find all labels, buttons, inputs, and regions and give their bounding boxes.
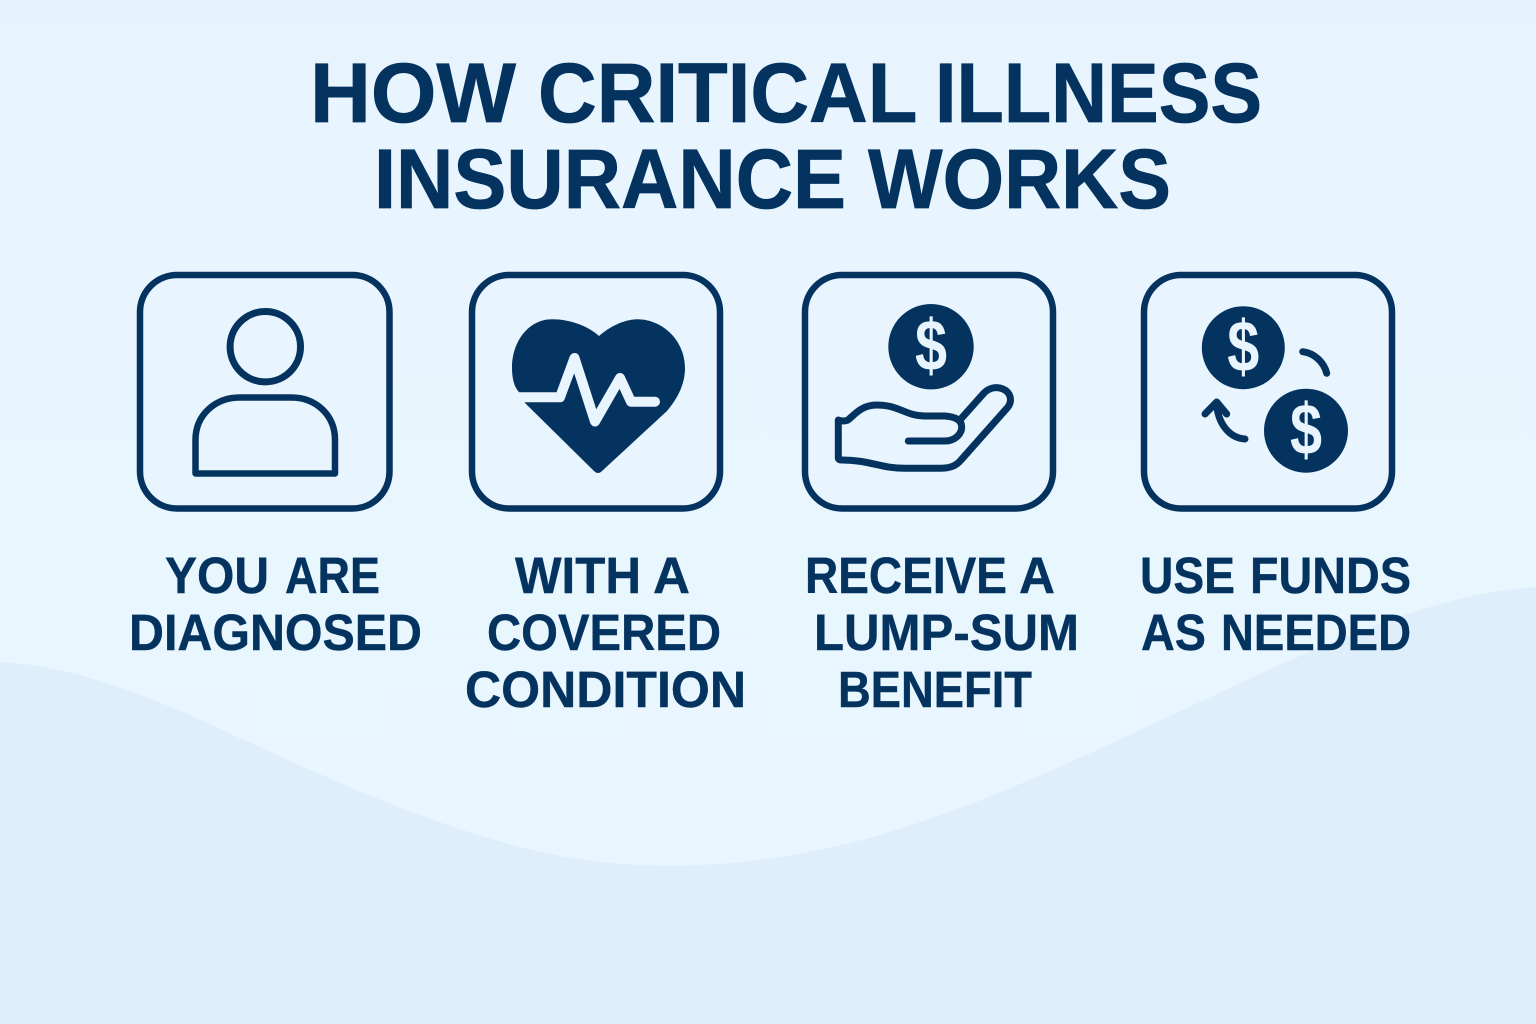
title: HOW [310, 46, 516, 140]
label: with a covered condition: A [653, 547, 690, 604]
title: WORKS [868, 132, 1171, 226]
label: use funds as needed: AS [1141, 604, 1206, 661]
icon: hand receiving coin [805, 275, 1053, 508]
label: with a covered condition: WITH [515, 547, 641, 604]
label: receive a lump-sum benefit: BENEFIT [838, 661, 1032, 718]
title: ILLNESS [935, 46, 1262, 140]
label: receive a lump-sum benefit [805, 547, 1079, 718]
label: with a covered condition: COVERED [487, 604, 721, 661]
step 2: covered condition [465, 275, 746, 718]
step 3: lump-sum benefit [805, 275, 1079, 718]
label: you are diagnosed: YOU [165, 547, 269, 604]
label: you are diagnosed [129, 547, 422, 661]
label: use funds as needed: NEEDED [1221, 604, 1411, 661]
label: with a covered condition: CONDITION [465, 661, 746, 718]
label: you are diagnosed: ARE [285, 547, 380, 604]
title [310, 46, 1262, 226]
label: use funds as needed: FUNDS [1250, 547, 1411, 604]
step 4: use funds as needed [1140, 275, 1411, 661]
label: use funds as needed: USE [1140, 547, 1235, 604]
label: with a covered condition [465, 547, 746, 718]
icon: heart with pulse [472, 275, 720, 508]
icon: circulating coins: $ [1290, 389, 1322, 470]
label: use funds as needed [1140, 547, 1411, 661]
step 1: you are diagnosed [129, 275, 422, 661]
icon: person [140, 275, 390, 508]
icon: circulating coins [1144, 275, 1392, 508]
label: receive a lump-sum benefit: LUMP-SUM [814, 604, 1079, 661]
background wave [0, 587, 1536, 1024]
label: receive a lump-sum benefit: RECEIVE [805, 547, 1007, 604]
label: you are diagnosed: DIAGNOSED [129, 604, 422, 661]
icon: hand receiving coin: $ [915, 305, 947, 386]
label: receive a lump-sum benefit: A [1019, 547, 1055, 604]
title: CRITICAL [538, 46, 916, 140]
icon: circulating coins: $ [1227, 306, 1259, 387]
title: INSURANCE [374, 132, 846, 226]
